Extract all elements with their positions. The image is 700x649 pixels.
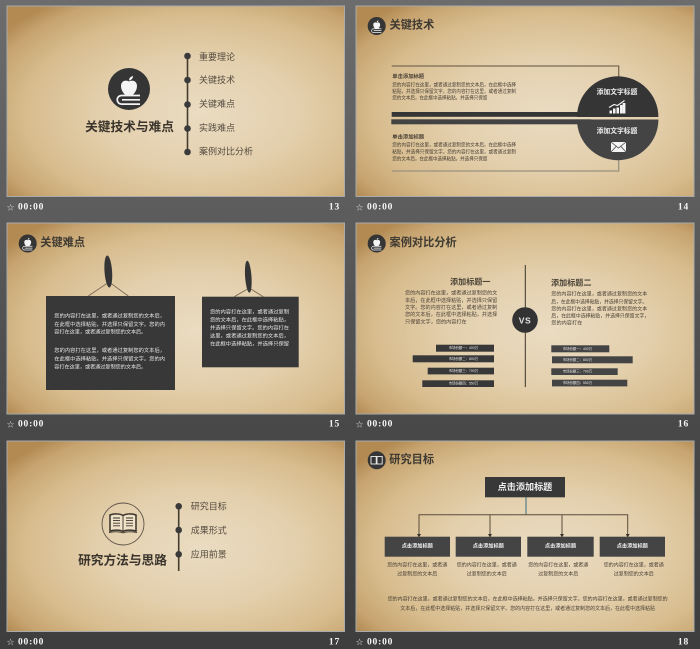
org chart node 4: 您的内容打在这里，或者通 <box>604 562 664 569</box>
badge: VS <box>512 307 538 333</box>
hanging sign left: 您的内容打在这里，或者通过复制您的文本后， <box>54 347 165 354</box>
heading: section title: 关键技术与难点 <box>85 119 174 134</box>
column one text: 添加标题一 <box>450 276 490 286</box>
org chart node 4: 点击添加标题 <box>617 542 649 550</box>
hanging sign right <box>202 261 299 367</box>
bar chart right <box>551 345 633 386</box>
heading: 关键技术 <box>390 18 434 32</box>
icon: slide header <box>368 234 386 253</box>
org chart node 3: 您的内容打在这里，或者通 <box>528 562 588 569</box>
timeline list: 案例对比分析 <box>199 146 253 156</box>
panel: slide 13 section cover <box>7 6 344 196</box>
org chart node 1: 您的内容打在这里，或者通 <box>387 562 447 569</box>
org chart node 3: 过复制您的文本后 <box>538 571 578 578</box>
heading: 关键难点 <box>40 235 85 249</box>
org chart root <box>485 477 565 497</box>
icon: apple on book <box>108 68 150 110</box>
bar chart right: 市场份额四：550万 <box>563 380 593 385</box>
icon: slide header <box>19 234 37 253</box>
footer: slide 17 <box>6 637 340 648</box>
footer: slide 15: 15 <box>329 420 340 430</box>
footer: slide 18: 18 <box>678 637 689 647</box>
column two text: 添加标题二 <box>551 278 591 288</box>
text block upper: 您的文本后，在此框中选择粘贴，并选择只保留 <box>392 95 487 102</box>
panel: slide 15 key difficulties <box>7 223 344 414</box>
footer: slide 16: ☆ <box>356 420 364 430</box>
text block bottom <box>388 596 668 612</box>
icon: slide header <box>368 17 386 35</box>
panel: slide 16 case comparison <box>356 223 694 414</box>
column one text: 文字。您的内容打在这里，或者通过复制 <box>405 304 497 311</box>
org chart node 2: 点击添加标题 <box>473 542 505 550</box>
hanging sign right: 您的内容打在这里，或者通过复制 <box>210 308 289 315</box>
text block upper <box>392 72 516 102</box>
icon: envelope <box>611 142 626 152</box>
footer: slide 16: 16 <box>678 420 689 430</box>
hanging sign right: 这里，或者通过复制您的文本后， <box>210 332 289 339</box>
text block lower: 粘贴，并选择只保留文字。您的内容打在这里，或者通过复制 <box>392 148 516 155</box>
org chart node 2: 过复制您的文本后 <box>467 571 507 578</box>
text block lower: 单击添加标题 <box>392 132 425 140</box>
footer: slide 14: 14 <box>678 202 689 212</box>
column two text <box>551 278 649 326</box>
footer: slide 15: ☆ <box>6 420 15 430</box>
text block lower: 您的内容打在这里，或者通过复制您的文本后，在此框中选择 <box>392 142 516 149</box>
footer: slide 14 <box>356 202 689 214</box>
frame line top <box>392 66 619 77</box>
column one text: 只保留文字，您的内容打在 <box>405 318 467 325</box>
bar chart left: 市场份额三：700万 <box>449 368 479 373</box>
panel: slide 18 research goals <box>356 441 694 632</box>
panel: slide 14 key technology <box>356 6 694 196</box>
hanging sign left <box>46 255 175 390</box>
footer: slide 13 <box>6 202 340 214</box>
hanging sign left: 在此框中选择粘贴，并选择只保留文字。您的内 <box>54 356 165 363</box>
footer: slide 16: 00:00 <box>367 420 393 430</box>
timeline list: 研究目标 <box>191 501 227 512</box>
column two text: 您的内容打在这里，或者通过复制您的文本 <box>551 291 647 298</box>
timeline list: 应用前景 <box>191 549 227 560</box>
column one text: 您的内容打在这里，或者通过复制您的文 <box>405 290 497 297</box>
divider <box>524 265 526 387</box>
footer: slide 14: ☆ <box>356 204 364 214</box>
footer: slide 16 <box>356 420 689 430</box>
hanging sign right: 您的文本后，在此框中选择粘贴， <box>210 316 289 323</box>
hanging sign left: 容打在这里，或者通过复制您的文本后。 <box>54 329 146 336</box>
hanging sign left: 在此框中选择粘贴，并选择只保留文字。您的内 <box>54 321 165 328</box>
footer: slide 15 <box>6 420 340 430</box>
column two text: 后，在此框中选择粘贴，并选择只保留文字。 <box>551 298 647 305</box>
timeline list: 成果形式 <box>191 524 227 535</box>
heading: 研究目标 <box>389 452 434 466</box>
org chart node 2 <box>456 537 521 578</box>
panel: slide 17 section cover <box>7 441 344 632</box>
frame line bottom <box>392 159 619 171</box>
badge: VS: VS <box>519 315 531 325</box>
footer: slide 14: 00:00 <box>367 202 393 212</box>
text block upper: 您的内容打在这里，或者通过复制您的文本后，在此框中选择 <box>392 81 516 88</box>
org chart node 4: 过复制您的文本后 <box>614 571 654 578</box>
column two text: 您的内容打在 <box>551 319 582 326</box>
icon: slide header <box>368 451 386 469</box>
timeline list <box>184 51 253 156</box>
heading: 案例对比分析 <box>390 235 457 249</box>
hanging sign right: 并选择只保留文字。您的内容打在 <box>210 324 289 331</box>
org chart node 1: 过复制您的文本后 <box>397 571 437 578</box>
circle: split badge <box>577 76 658 160</box>
circle: split badge: 添加文字标题 <box>597 87 638 96</box>
timeline list: 关键难点 <box>199 98 235 109</box>
org chart root: 点击添加标题 <box>498 481 552 492</box>
org chart node 1 <box>385 537 450 578</box>
text block bottom: 文本后，在此框中选择粘贴，并选择只保留文字。您的内容打在这里，或者通过复制您的文本后，在此框中选择粘贴 <box>400 605 655 612</box>
column one text <box>405 276 497 325</box>
org chart node 3 <box>527 537 594 578</box>
footer: slide 13: 13 <box>329 202 340 212</box>
org chart node 3: 点击添加标题 <box>545 542 577 550</box>
icon: open book in ring <box>102 503 144 545</box>
bar chart left: 市场份额一：400万 <box>449 345 479 350</box>
footer: slide 17: ☆ <box>6 638 15 648</box>
hanging sign left: 容打在这里，或者通过复制您的文本后。 <box>54 364 146 371</box>
heading: section title: 研究方法与思路 <box>78 553 167 568</box>
timeline list <box>175 501 227 571</box>
hanging sign right: 在此框中选择粘贴，并选择只保留 <box>210 341 289 348</box>
bar chart left <box>413 345 494 387</box>
timeline list: 实践难点 <box>199 122 235 133</box>
timeline list: 重要理论 <box>199 51 235 62</box>
bar chart right: 市场份额三：700万 <box>563 369 593 374</box>
footer: slide 18: ☆ <box>356 638 364 648</box>
org chart node 4 <box>600 537 665 578</box>
text block upper: 单击添加标题 <box>392 72 425 80</box>
icon: bar chart <box>609 100 625 114</box>
footer: slide 17: 17 <box>329 637 340 647</box>
footer: slide 18 <box>356 637 689 648</box>
bar chart right: 市场份额一：400万 <box>563 346 593 351</box>
text block lower <box>392 132 516 162</box>
footer: slide 15: 00:00 <box>18 420 44 430</box>
hanging sign left: 您的内容打在这里，或者通过复制您的文本后， <box>54 313 165 320</box>
bars <box>391 112 592 124</box>
text block upper: 粘贴，并选择只保留文字。您的内容打在这里，或者通过复制 <box>392 88 516 95</box>
text block lower: 您的文本后，在此框中选择粘贴，并选择只保留 <box>392 155 487 162</box>
column one text: 本后，在此框中选择粘贴，并选择只保留 <box>405 297 497 304</box>
org chart connectors <box>417 497 630 538</box>
footer: slide 18: 00:00 <box>367 637 393 647</box>
footer: slide 13: ☆ <box>6 204 15 214</box>
column two text: 您的内容打在这里，或者通过复制您的文本 <box>551 305 647 312</box>
text block bottom: 您的内容打在这里，或者通过复制您的文本后，在此框中选择粘贴，并选择只保留文字。您的内容打在这里，或者通过复制您的 <box>388 596 668 603</box>
circle: split badge: 添加文字标题 <box>597 126 638 135</box>
bar chart left: 市场份额四：550万 <box>449 381 479 386</box>
column two text: 后，在此框中选择粘贴，并选择只保留文字， <box>551 312 649 319</box>
org chart node 1: 点击添加标题 <box>402 542 434 550</box>
org chart node 2: 您的内容打在这里，或者通 <box>457 562 517 569</box>
bar chart right: 市场份额二：800万 <box>563 357 593 362</box>
bar chart left: 市场份额二：800万 <box>449 356 479 361</box>
timeline list: 关键技术 <box>199 74 235 85</box>
column one text: 您的文本后，在此框中选择粘贴，并选择 <box>405 311 497 318</box>
footer: slide 17: 00:00 <box>18 637 44 647</box>
footer: slide 13: 00:00 <box>18 202 44 212</box>
